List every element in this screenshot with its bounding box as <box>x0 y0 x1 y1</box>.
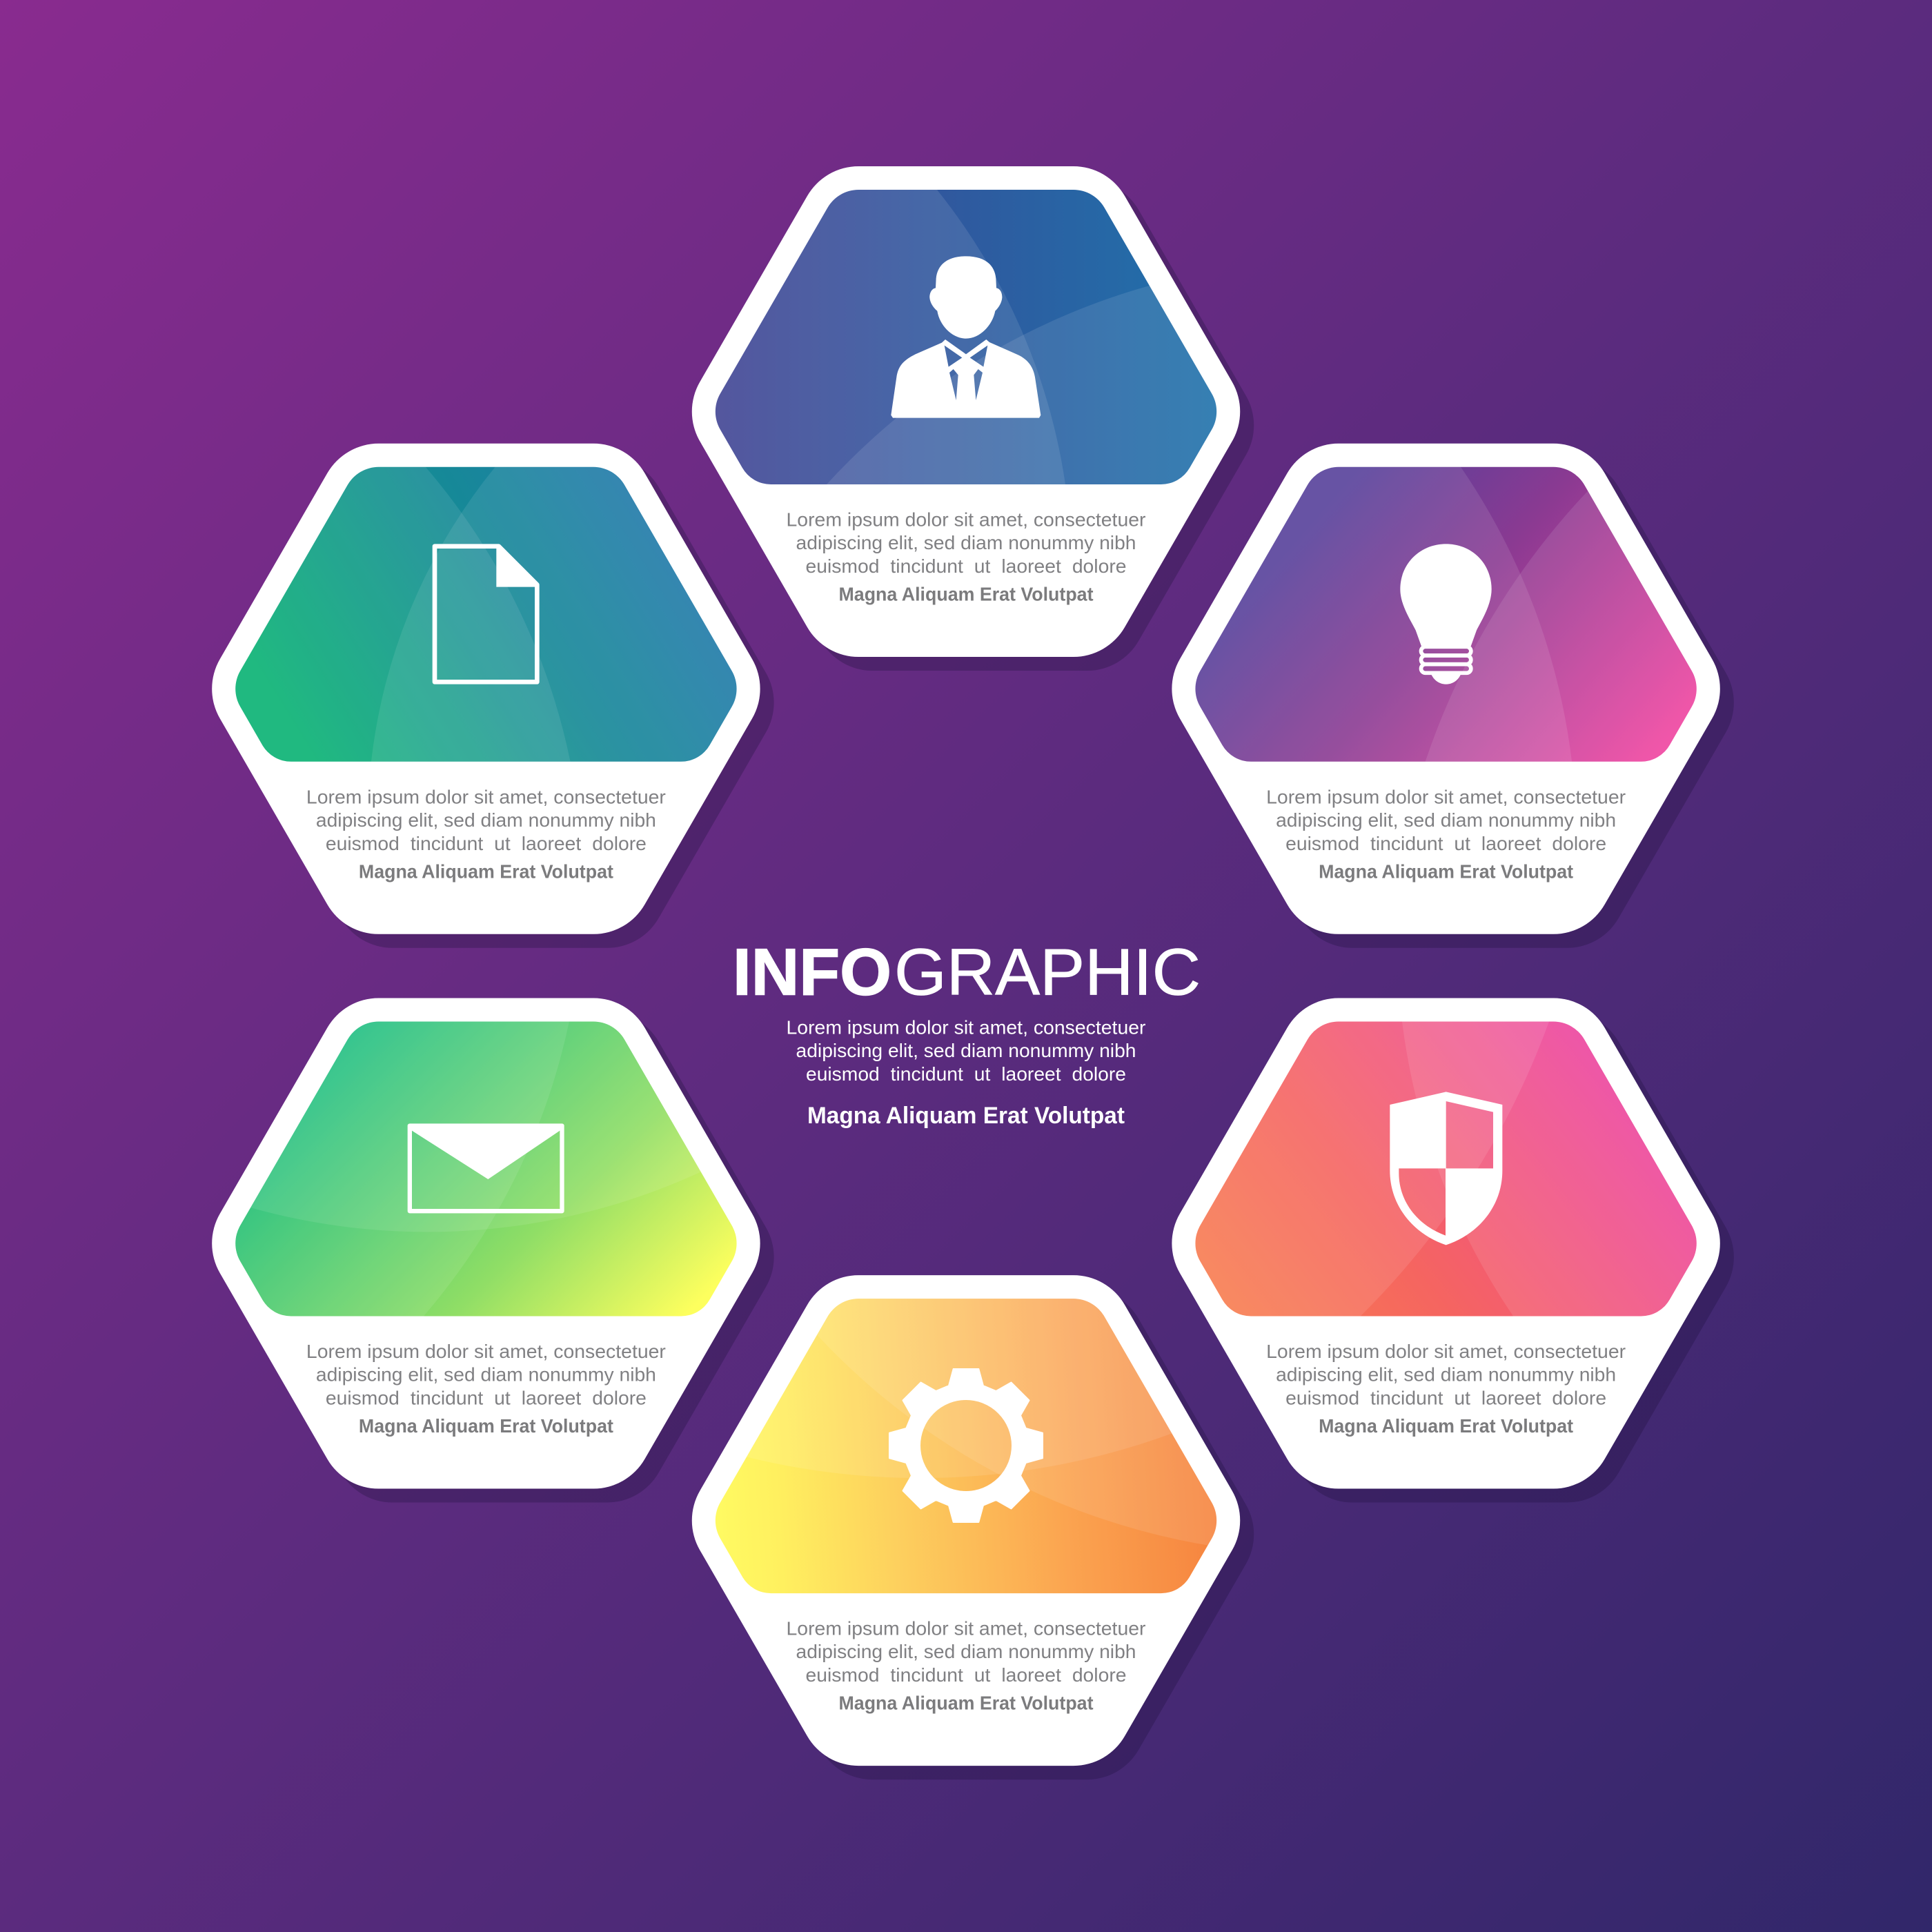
text block: adipiscing elit, sed diam nonummy nibh <box>796 1641 1136 1662</box>
text block: adipiscing elit, sed diam nonummy nibh <box>1276 1363 1616 1386</box>
text block: Lorem ipsum dolor sit amet, consectetuer <box>1266 786 1626 807</box>
text block <box>306 786 666 882</box>
text block: adipiscing elit, sed diam nonummy nibh <box>796 532 1136 553</box>
panel: upper right hexagon, light bulb <box>1172 444 1725 934</box>
panel: top hexagon, person <box>691 166 1241 657</box>
text block: Magna Aliquam Erat Volutpat <box>359 1415 613 1437</box>
text block <box>787 1618 1145 1714</box>
center text block: Magna Aliquam Erat Volutpat <box>807 1103 1125 1129</box>
text block: euismod tincidunt ut laoreet dolore <box>326 1387 647 1409</box>
icon: shield <box>1390 1092 1502 1245</box>
title <box>733 936 1201 1009</box>
text block: Lorem ipsum dolor sit amet, consectetuer <box>306 1341 666 1362</box>
text block: Lorem ipsum dolor sit amet, consectetuer <box>1266 1341 1626 1362</box>
text block: Lorem ipsum dolor sit amet, consectetuer <box>787 1618 1145 1639</box>
icon: light bulb <box>1400 544 1492 684</box>
purple to pink gradient panel with arcs <box>1195 466 1697 762</box>
text block: Magna Aliquam Erat Volutpat <box>359 860 613 882</box>
icon: businessman <box>891 256 1041 418</box>
text block: Magna Aliquam Erat Volutpat <box>839 1693 1093 1714</box>
text block: Magna Aliquam Erat Volutpat <box>839 584 1093 604</box>
center text block: adipiscing elit, sed diam nonummy nibh <box>796 1040 1136 1061</box>
panel: bottom hexagon, gear <box>690 1242 1256 1766</box>
center text block: euismod tincidunt ut laoreet dolore <box>806 1063 1126 1085</box>
icon: document <box>435 546 538 682</box>
text block: Magna Aliquam Erat Volutpat <box>1319 860 1573 882</box>
center text block: Lorem ipsum dolor sit amet, consectetuer <box>787 1017 1145 1038</box>
panel: upper left hexagon, document <box>207 444 760 934</box>
text block: euismod tincidunt ut laoreet dolore <box>806 1664 1126 1686</box>
text block <box>787 509 1145 604</box>
text block <box>1266 1341 1626 1437</box>
text block: euismod tincidunt ut laoreet dolore <box>806 555 1126 577</box>
panel: lower left hexagon, envelope <box>207 966 773 1489</box>
panel: lower right hexagon, shield <box>1172 998 1725 1489</box>
text block: Lorem ipsum dolor sit amet, consectetuer <box>787 509 1145 530</box>
teal gradient panel with arcs <box>235 466 737 762</box>
text block: adipiscing elit, sed diam nonummy nibh <box>1276 809 1616 831</box>
text block <box>1266 786 1626 882</box>
text block: euismod tincidunt ut laoreet dolore <box>1285 833 1606 854</box>
text block: Magna Aliquam Erat Volutpat <box>1319 1415 1573 1437</box>
orange to pink gradient panel with arcs <box>1195 1021 1697 1317</box>
icon: gear <box>889 1369 1043 1522</box>
green to yellow gradient panel with arcs <box>235 1021 737 1317</box>
title: GRAPHIC <box>894 936 1201 1009</box>
text block: Lorem ipsum dolor sit amet, consectetuer <box>306 786 666 807</box>
text block <box>306 1341 666 1437</box>
hexagon drop shadows <box>226 180 1734 1780</box>
yellow to orange gradient panel with arcs <box>690 1242 1256 1601</box>
text block: adipiscing elit, sed diam nonummy nibh <box>316 809 656 831</box>
text block: adipiscing elit, sed diam nonummy nibh <box>316 1363 656 1386</box>
center text block <box>787 1017 1145 1129</box>
text block: euismod tincidunt ut laoreet dolore <box>1285 1387 1606 1409</box>
icon: envelope <box>410 1125 562 1211</box>
title: INFO <box>733 936 891 1009</box>
blue gradient panel with arcs <box>715 190 1217 484</box>
text block: euismod tincidunt ut laoreet dolore <box>326 833 647 854</box>
